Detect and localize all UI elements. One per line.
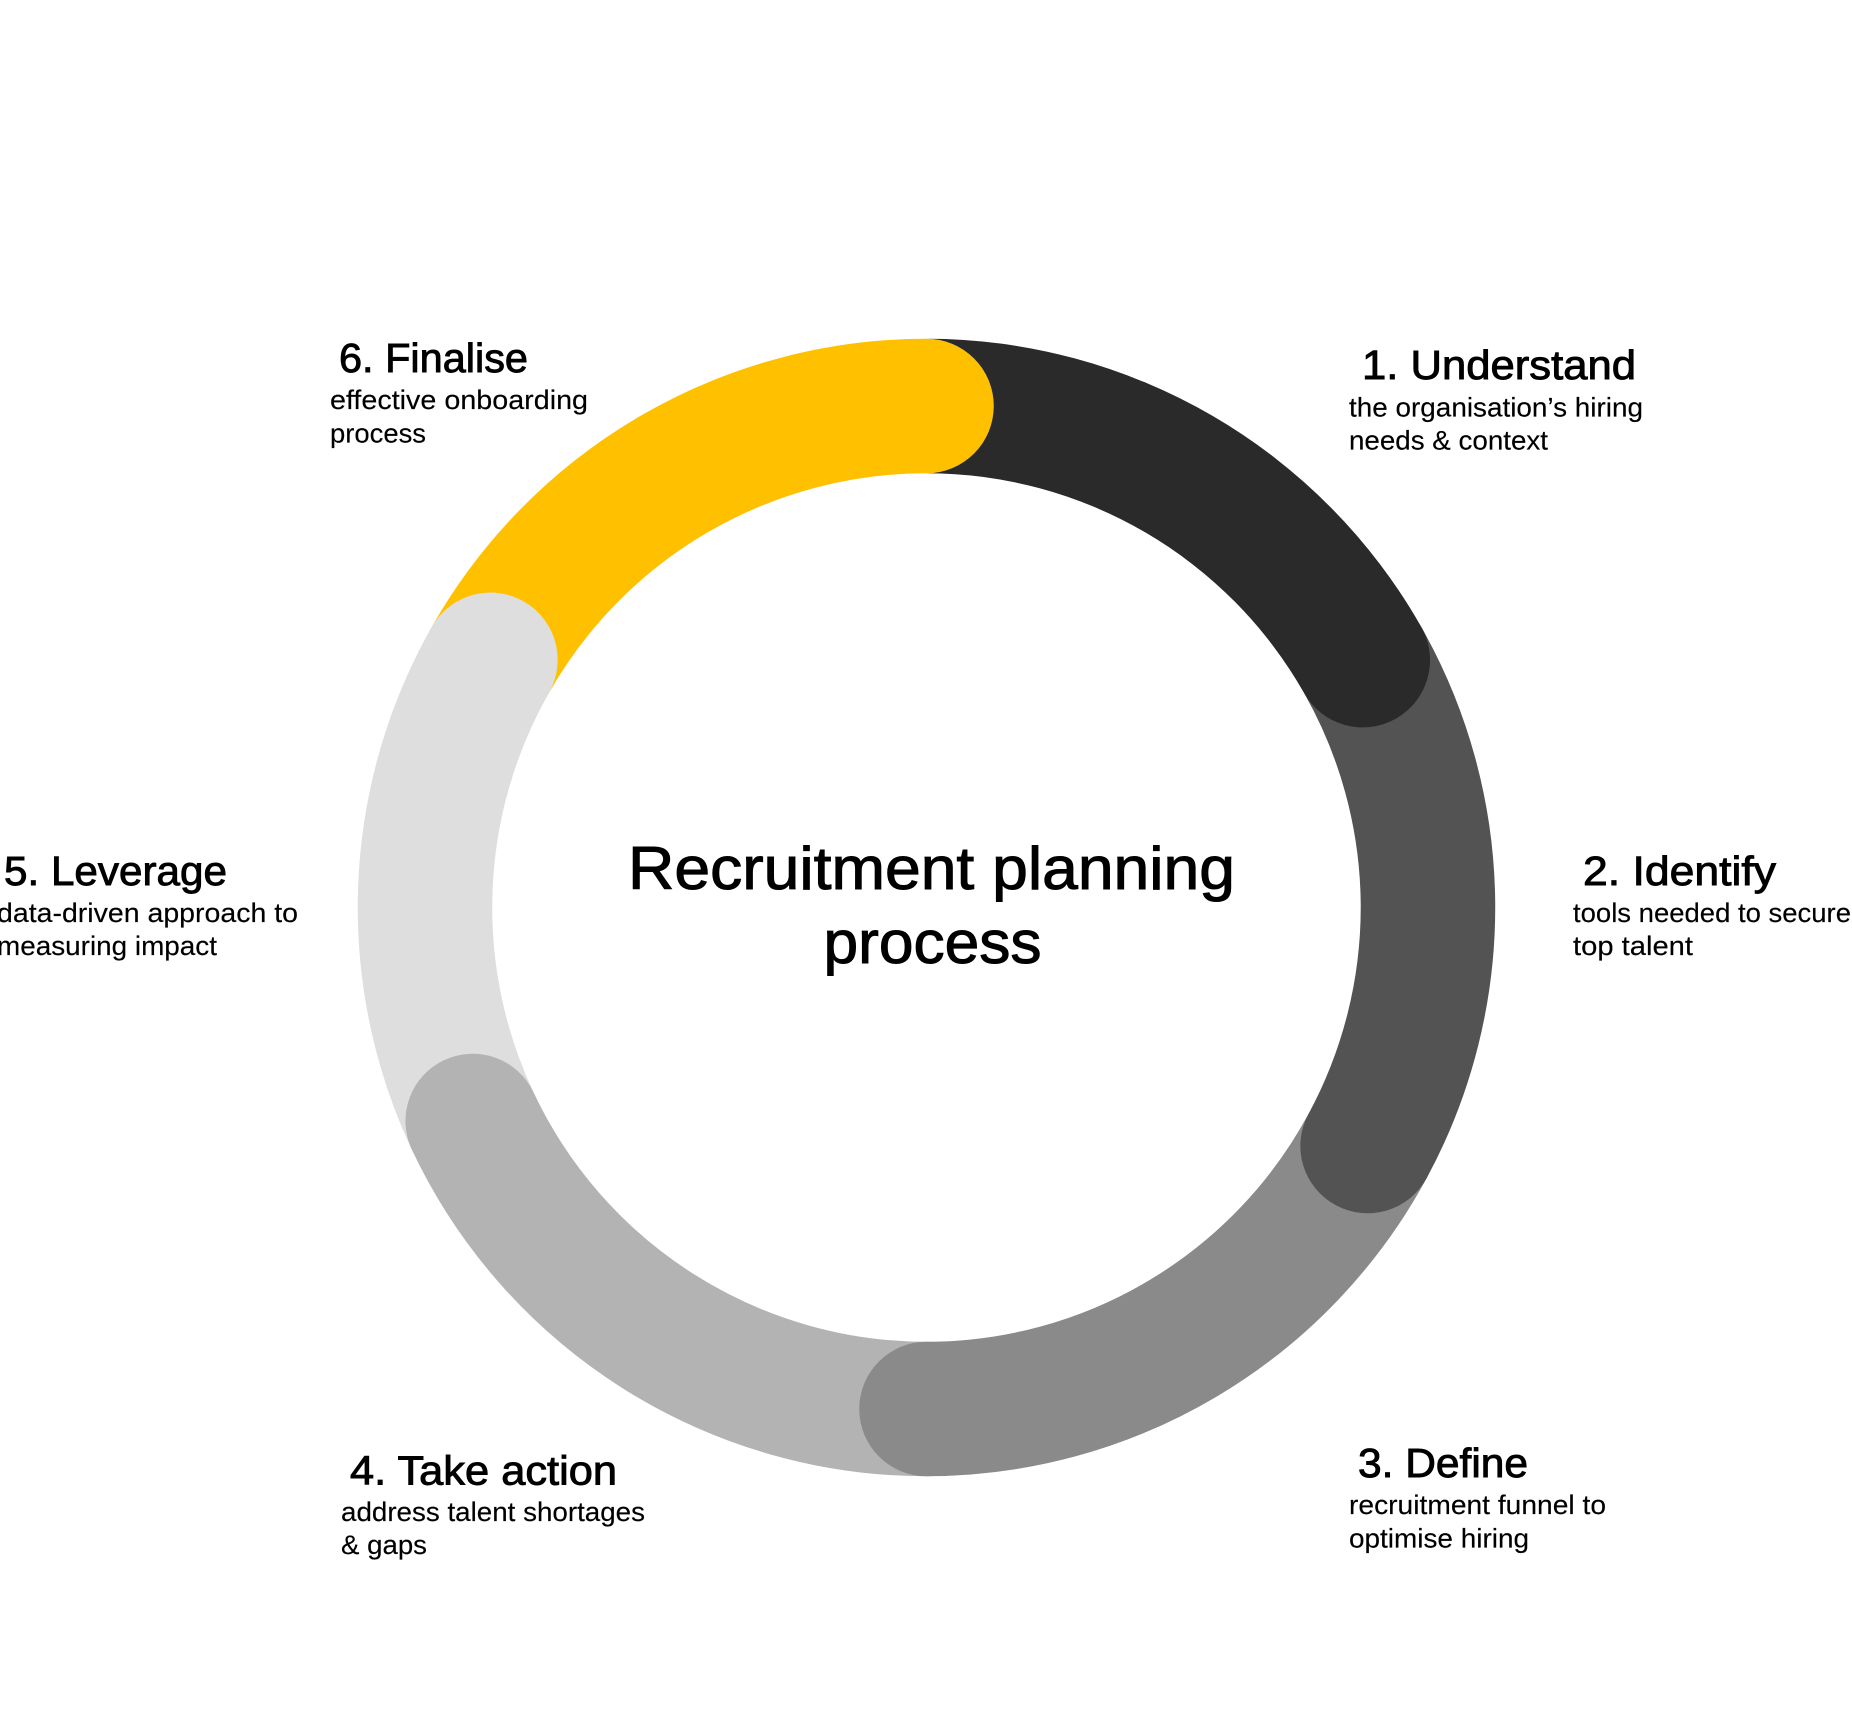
- label: step 3 define: optimise hiring: [1349, 1524, 1529, 1554]
- label: step 6 finalise: 6. Finalise: [339, 335, 528, 381]
- label: step 5 leverage: data-driven approach to: [0, 898, 298, 928]
- label: step 4 take action: & gaps: [341, 1530, 427, 1560]
- ring segment 3: define (mid grey): [926, 1146, 1368, 1409]
- label: step 4 take action: 4. Take action: [350, 1448, 617, 1494]
- label: step 5 leverage: 5. Leverage: [4, 848, 227, 894]
- label: step 2 identify: 2. Identify: [1583, 848, 1777, 894]
- label: step 6 finalise: [330, 335, 588, 448]
- ring segment 1: understand (near black): [926, 339, 1430, 727]
- label: step 3 define: 3. Define: [1358, 1440, 1528, 1486]
- label: step 1 understand: the organisation’s hiring: [1349, 392, 1643, 422]
- ring segment 6: finalise (yellow): [490, 406, 926, 660]
- label: step 3 define: [1349, 1440, 1606, 1554]
- label: step 6 finalise: effective onboarding: [330, 385, 588, 415]
- title: Recruitment planning: [628, 835, 1235, 902]
- title: [628, 835, 1235, 976]
- label: step 5 leverage: [0, 848, 298, 961]
- label: step 1 understand: needs & context: [1349, 426, 1548, 456]
- label: step 4 take action: [341, 1448, 645, 1560]
- label: step 6 finalise: process: [330, 418, 426, 448]
- label: step 1 understand: [1349, 342, 1643, 456]
- ring segment 4: take action (light grey): [473, 1121, 926, 1409]
- label: step 1 understand: 1. Understand: [1362, 342, 1636, 388]
- title: process: [824, 909, 1042, 976]
- label: step 2 identify: [1573, 848, 1851, 961]
- label: step 2 identify: tools needed to secure: [1573, 898, 1851, 928]
- ring chart: six process stages: [425, 339, 1430, 1409]
- label: step 4 take action: address talent shortages: [341, 1497, 645, 1527]
- ring segment 2: identify (dark grey): [1363, 660, 1428, 1146]
- label: step 5 leverage: measuring impact: [0, 931, 218, 961]
- label: step 2 identify: top talent: [1573, 931, 1694, 961]
- label: step 3 define: recruitment funnel to: [1349, 1490, 1606, 1520]
- ring segment 5: leverage (lightest grey): [425, 660, 490, 1121]
